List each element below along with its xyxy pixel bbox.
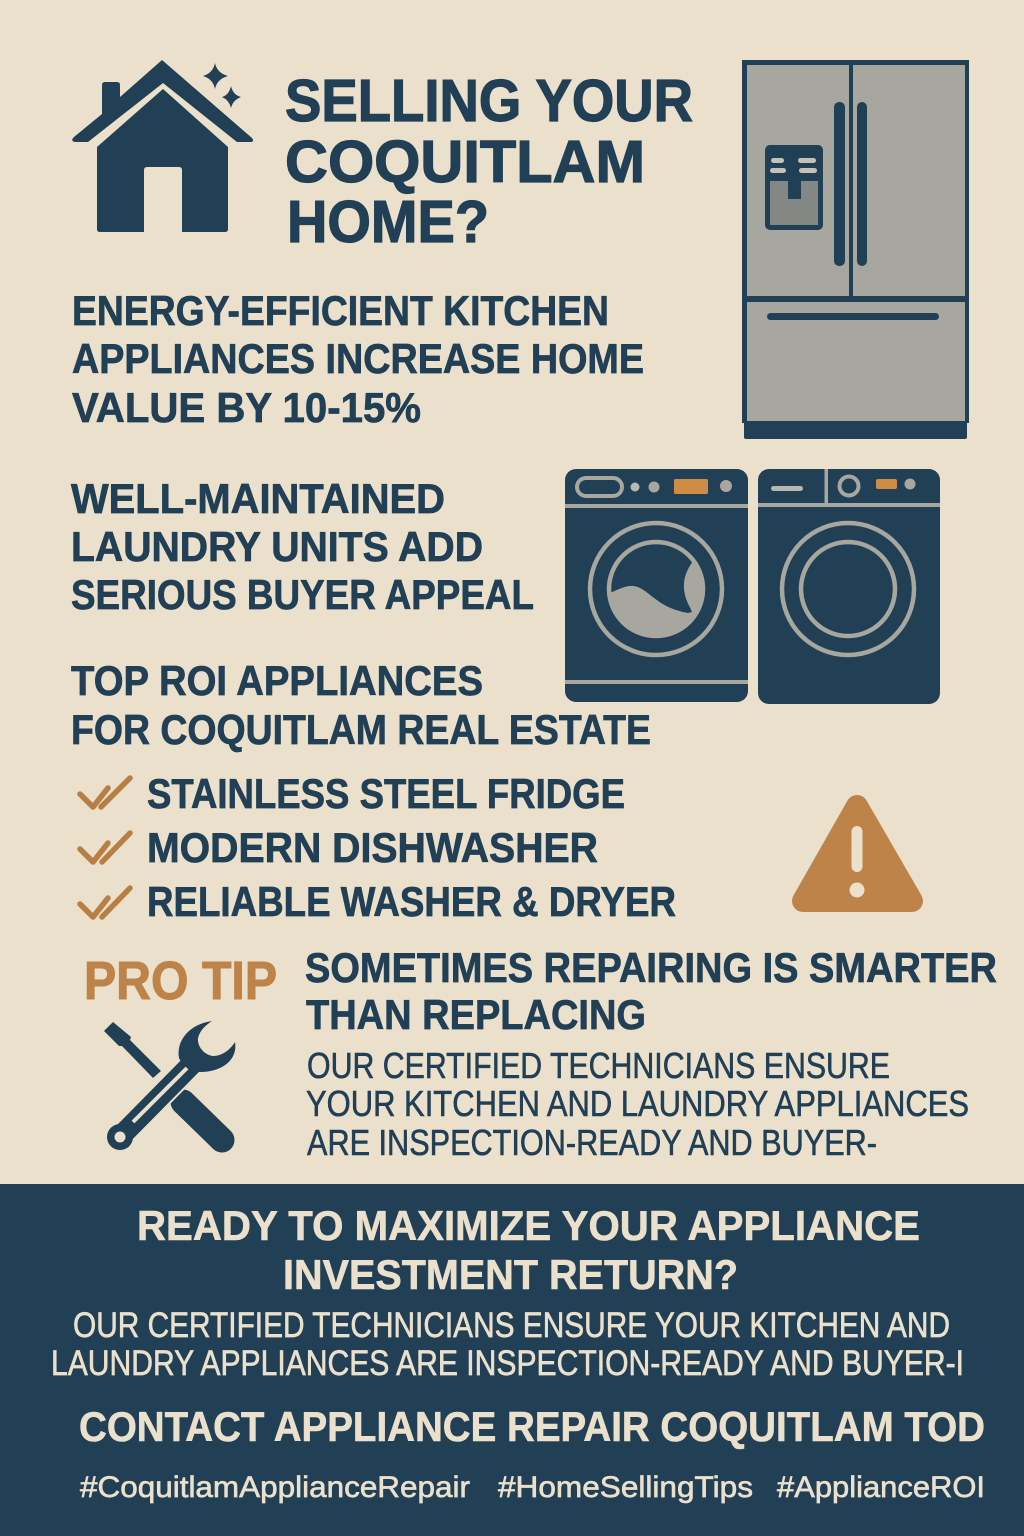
- footer heading: READY TO MAXIMIZE YOUR APPLIANCE: [137, 1202, 920, 1249]
- footer body text: [51, 1306, 964, 1383]
- text: pro tip body: ARE INSPECTION-READY AND BUYER-: [307, 1122, 877, 1163]
- text: laundry units: WELL-MAINTAINED: [71, 475, 445, 522]
- icon: dryer: [758, 469, 940, 704]
- hashtags: #ApplianceROI: [777, 1471, 985, 1504]
- checklist: [80, 770, 676, 925]
- hashtags: #CoquitlamApplianceRepair: [80, 1471, 470, 1504]
- heading: repairing is smarter: [305, 944, 997, 1038]
- checklist text: STAINLESS STEEL FRIDGE: [147, 770, 625, 817]
- footer heading: [137, 1202, 920, 1298]
- heading: top ROI appliances: TOP ROI APPLIANCES: [71, 657, 483, 704]
- heading: top ROI appliances: FOR COQUITLAM REAL ESTATE: [71, 706, 651, 753]
- text: laundry units: SERIOUS BUYER APPEAL: [71, 571, 534, 618]
- text: energy-efficient appliances: APPLIANCES INCREASE HOME: [72, 335, 644, 382]
- hashtags: [80, 1471, 985, 1504]
- text: energy-efficient appliances: ENERGY-EFFICIENT KITCHEN: [72, 287, 609, 334]
- hashtags: #HomeSellingTips: [498, 1471, 753, 1504]
- checklist text: [147, 770, 676, 925]
- title: COQUITLAM: [285, 129, 645, 195]
- title: [285, 68, 693, 255]
- title: SELLING YOUR: [285, 68, 693, 134]
- text: energy-efficient appliances: [72, 287, 644, 431]
- text: laundry units: LAUNDRY UNITS ADD: [71, 523, 483, 570]
- checklist text: MODERN DISHWASHER: [147, 824, 598, 871]
- icon: crossed wrench and screwdriver: [104, 1021, 235, 1150]
- text: energy-efficient appliances: VALUE BY 10-15%: [72, 384, 421, 431]
- text: laundry units: [71, 475, 534, 618]
- heading: repairing is smarter: THAN REPLACING: [306, 991, 646, 1038]
- heading: top ROI appliances: [71, 657, 651, 753]
- footer heading: INVESTMENT RETURN?: [283, 1251, 738, 1298]
- text: pro tip body: OUR CERTIFIED TECHNICIANS ENSURE: [307, 1045, 890, 1086]
- label: pro tip: PRO TIP: [84, 951, 277, 1011]
- icon: stainless steel fridge: [742, 60, 969, 439]
- text: pro tip body: [306, 1045, 969, 1163]
- panel: call to action footer: [0, 1184, 1024, 1536]
- icon: washer: [565, 469, 748, 702]
- icon: check marks: [80, 778, 130, 917]
- title: HOME?: [287, 189, 489, 255]
- icon: warning triangle: [803, 806, 912, 901]
- checklist text: RELIABLE WASHER & DRYER: [147, 878, 676, 925]
- icon: house with sparkles: [72, 60, 253, 232]
